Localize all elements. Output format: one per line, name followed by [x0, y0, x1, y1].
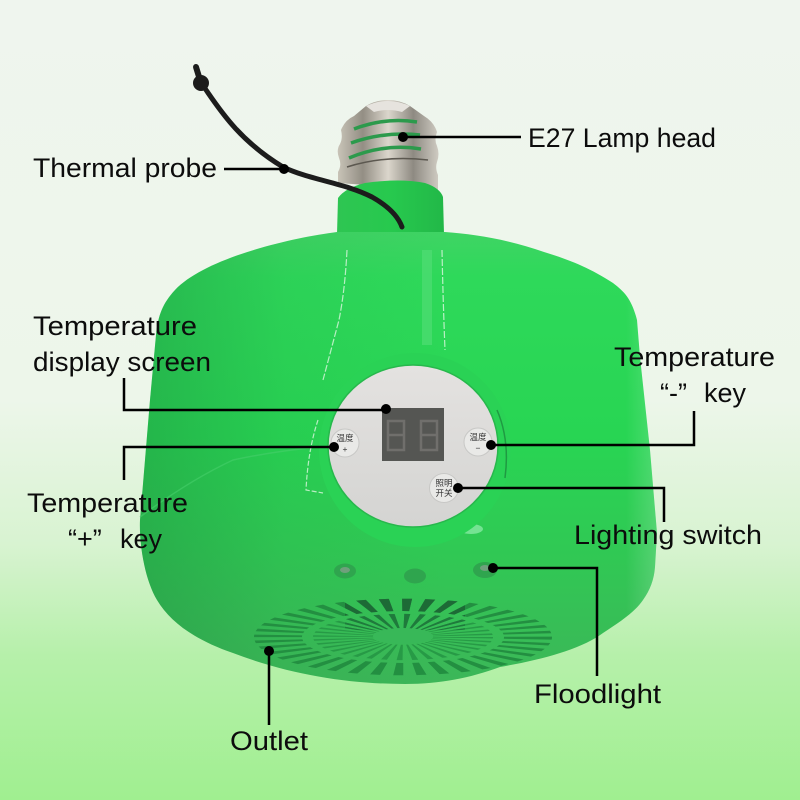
body side highlights [140, 250, 483, 534]
body side shading [140, 232, 657, 684]
label: lighting switch: Lighting switch [574, 520, 762, 550]
label: floodlight [488, 563, 662, 709]
button: lighting switch [430, 474, 458, 502]
label: temperature minus key: key [704, 378, 747, 408]
temperature display screen [382, 408, 444, 461]
label: temperature minus key: “-” [660, 378, 687, 408]
thermal probe cable [195, 67, 402, 227]
button: temperature minus: 温度 [469, 432, 487, 442]
label: lighting switch [453, 483, 762, 550]
label: outlet: Outlet [230, 726, 309, 756]
button: temperature plus [331, 429, 359, 457]
lamp head: E27 screw base [338, 100, 438, 190]
lamp illustration [140, 67, 657, 684]
lamp collar [337, 180, 444, 234]
label: temperature plus key [27, 442, 339, 554]
label: temperature display screen [33, 311, 391, 414]
button: lighting switch: 开关 [435, 488, 453, 498]
button: temperature plus: + [343, 444, 348, 454]
button: lighting switch: 照明 [435, 478, 453, 488]
label: thermal probe: Thermal probe [33, 153, 217, 183]
label: floodlight: Floodlight [534, 679, 662, 709]
button: temperature minus: − [476, 443, 481, 453]
lamp body [140, 232, 657, 684]
vent central hub [373, 628, 433, 644]
label: temperature plus key: Temperature [27, 488, 188, 518]
button: temperature plus: 温度 [336, 433, 354, 443]
label: temperature display screen: Temperature [33, 311, 197, 341]
control panel [319, 353, 511, 547]
label: temperature display screen: display screen [33, 347, 211, 377]
label: temperature plus key: “+” [68, 524, 102, 554]
outlet vents [278, 605, 528, 669]
vent dark upper slots [345, 598, 465, 630]
label: temperature minus key: Temperature [614, 342, 775, 372]
label: E27 lamp head [398, 123, 716, 153]
label: temperature plus key: key [120, 524, 163, 554]
label: thermal probe [33, 153, 289, 183]
label: E27 lamp head: E27 Lamp head [528, 123, 716, 153]
button: temperature minus [464, 428, 492, 456]
floodlight holes [334, 562, 497, 584]
label: temperature minus key [486, 342, 775, 450]
label: outlet [230, 646, 309, 756]
